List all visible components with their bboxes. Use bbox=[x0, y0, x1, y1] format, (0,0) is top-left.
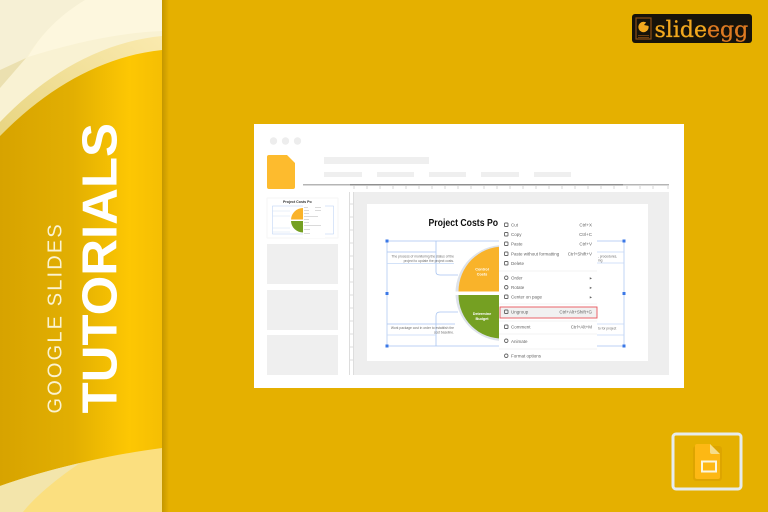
context menu: ▸ bbox=[590, 285, 593, 290]
context menu bbox=[499, 218, 597, 360]
slide title: Project Costs Po bbox=[428, 217, 498, 229]
panel: left sidebar bbox=[0, 0, 169, 512]
context menu: Ctrl+Alt+M bbox=[571, 325, 592, 330]
chart: half pie with connectors: Work package cost in order to establish the bbox=[391, 326, 454, 330]
slide thumbnails: Project Costs Po bbox=[283, 200, 313, 204]
toolbar placeholders bbox=[324, 157, 571, 177]
context menu: Format options bbox=[511, 354, 542, 359]
context menu: ▸ bbox=[590, 276, 593, 281]
context menu: Ctrl+Alt+Shift+G bbox=[559, 310, 592, 315]
context menu: Delete bbox=[511, 261, 525, 266]
icon: slides file bbox=[267, 155, 295, 189]
horizontal ruler bbox=[303, 184, 669, 189]
logo: slideegg: slide bbox=[654, 18, 707, 43]
chart: half pie with connectors: Control bbox=[475, 268, 489, 272]
logo: slideegg bbox=[632, 14, 752, 43]
context menu: Center on page bbox=[511, 295, 543, 300]
logo: slideegg: egg bbox=[707, 18, 748, 43]
chart: half pie with connectors bbox=[386, 240, 626, 348]
chart: half pie with connectors: Determine bbox=[473, 312, 491, 316]
panel: Google Slides window mockup bbox=[254, 124, 684, 388]
context menu: Comment bbox=[511, 325, 531, 330]
icon: Google Slides badge bbox=[673, 434, 741, 489]
context menu: Rotate bbox=[511, 285, 525, 290]
context menu: Animate bbox=[511, 339, 528, 344]
slide thumbnails bbox=[267, 198, 338, 375]
context menu: Ctrl+V bbox=[579, 242, 592, 247]
context menu: Ctrl+X bbox=[579, 223, 592, 228]
chart: half pie with connectors: , procedures, bbox=[598, 254, 617, 258]
chart: half pie with connectors: cost baseline. bbox=[434, 330, 454, 334]
context menu: Order bbox=[511, 276, 523, 281]
context menu: Copy bbox=[511, 232, 522, 237]
slide canvas bbox=[354, 192, 669, 375]
window dots bbox=[270, 137, 301, 145]
context menu: Ungroup bbox=[511, 310, 529, 315]
slide bbox=[367, 204, 648, 361]
heading: Tutorials: TUTORIALS bbox=[72, 123, 127, 414]
heading: Google Slides: GOOGLE SLIDES bbox=[44, 222, 66, 414]
context menu: Cut bbox=[511, 223, 519, 228]
vertical ruler bbox=[350, 192, 354, 375]
context menu: ▸ bbox=[590, 295, 593, 300]
context menu: Paste bbox=[511, 242, 523, 247]
context menu: Ctrl+C bbox=[579, 232, 593, 237]
chart: half pie with connectors: project to update the project costs. bbox=[404, 259, 454, 263]
chart: half pie with connectors: The process of monitoring the status of the bbox=[392, 254, 454, 258]
chart: half pie with connectors: ing bbox=[598, 258, 603, 262]
chart: half pie with connectors: Budget bbox=[475, 317, 489, 321]
chart: half pie with connectors: to for project bbox=[598, 326, 616, 330]
chart: half pie with connectors: Costs bbox=[477, 272, 487, 276]
context menu: Paste without formatting bbox=[511, 252, 560, 257]
context menu: Ctrl+Shift+V bbox=[568, 252, 592, 257]
